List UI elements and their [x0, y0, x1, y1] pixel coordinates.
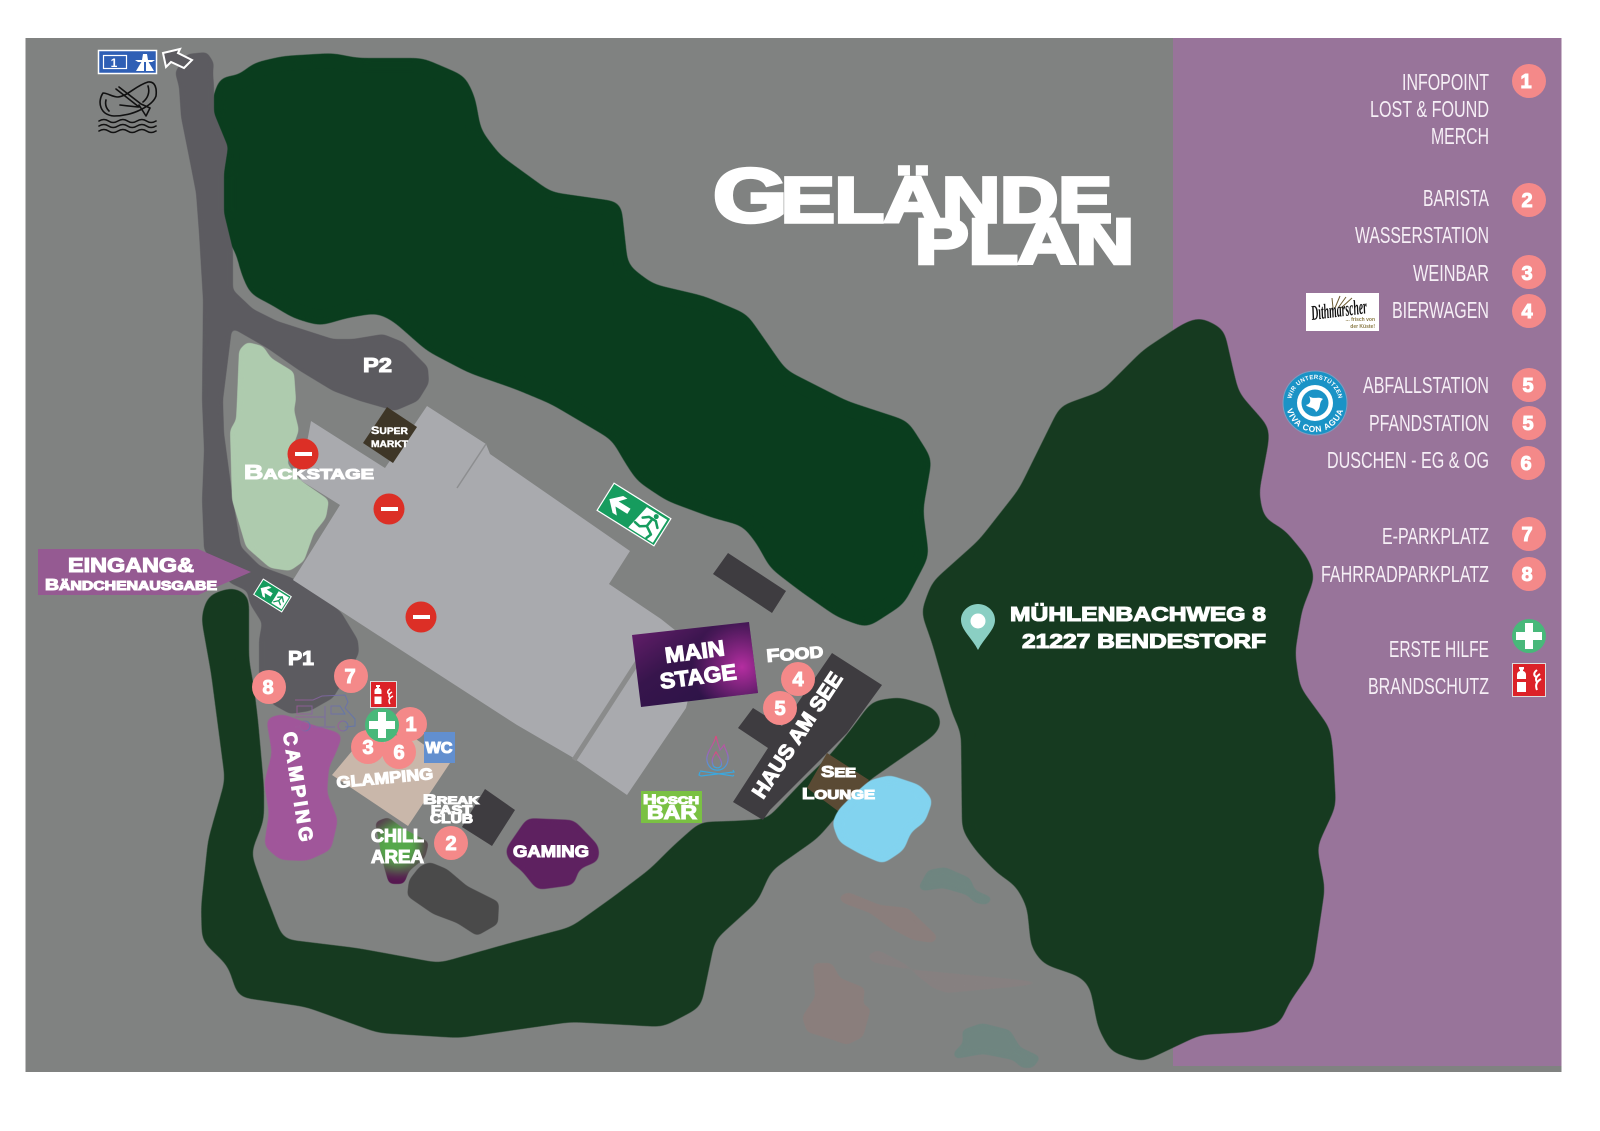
- icon: fire extinguisher sign on map: [370, 682, 396, 708]
- building: east shed: [713, 553, 786, 613]
- address: 21227 BENDESTORF: [1022, 631, 1266, 653]
- legend: weinbar: WEINBAR: [1413, 260, 1489, 286]
- road and parking areas: [175, 52, 429, 714]
- legend: erste hilfe: ERSTE HILFE: [1389, 636, 1489, 662]
- area: chill area: [375, 817, 429, 884]
- legend fire extinguisher icon: [1512, 664, 1546, 696]
- legend marker 5 pfand: 5: [1522, 413, 1534, 435]
- icon: autobahn sign: 1: [111, 56, 118, 70]
- exit sign: small: [254, 579, 291, 612]
- label: breakfast club: CLUB: [430, 811, 473, 826]
- area: glamping: [332, 733, 450, 826]
- marker 8 on map: [252, 670, 286, 704]
- no-entry sign 2: [374, 494, 404, 524]
- legend marker 5 pfand: [1512, 406, 1546, 440]
- title: GELÄNDE: [713, 154, 1112, 239]
- legend marker 8: [1512, 557, 1546, 591]
- legend marker 1: [1512, 64, 1546, 98]
- label: supermarkt: [371, 425, 409, 449]
- forest: north: [211, 53, 932, 628]
- legend: infopoint, lost and found, merch: [1370, 69, 1489, 149]
- icon: campfire: [699, 736, 734, 776]
- panel: legend background: [1173, 38, 1562, 1066]
- label: breakfast club: B REAK: [423, 791, 479, 807]
- faint decorative terrain patches: [802, 867, 1042, 1068]
- label: gaming: GAMING: [513, 842, 589, 861]
- main stage: MAIN: [663, 635, 726, 668]
- marker 3 on map: [351, 730, 385, 764]
- sign: hosch bar: BAR: [647, 803, 697, 824]
- label: p2: P2: [363, 355, 392, 377]
- marker 4 on map: [781, 662, 815, 696]
- icon: autobahn sign: [98, 50, 156, 74]
- label: breakfast club: [423, 791, 479, 826]
- label: chill area: [371, 826, 424, 867]
- area: gaming: [505, 818, 599, 890]
- label: chill area: AREA: [371, 847, 424, 867]
- forest: east: [921, 317, 1336, 1062]
- legend first aid icon: [1512, 619, 1546, 653]
- exit sign: large: [597, 483, 671, 546]
- legend: infopoint, lost and found, merch: MERCH: [1431, 123, 1489, 149]
- lake: [832, 775, 933, 864]
- label: breakfast club: FAST: [431, 803, 473, 817]
- logo: viva con agua: VIVA CON AGUA: [1287, 408, 1344, 432]
- arrow: direction to autobahn: [163, 49, 192, 68]
- building: breakfast club: [462, 789, 515, 846]
- legend marker 3: [1512, 255, 1546, 289]
- legend marker 8: 8: [1521, 564, 1533, 586]
- no-entry sign 3: [406, 602, 436, 632]
- legend marker 6: 6: [1520, 453, 1532, 475]
- legend marker 6: [1511, 446, 1545, 480]
- icon: canoe: [99, 82, 156, 132]
- legend: brandschutz: BRANDSCHUTZ: [1368, 673, 1489, 699]
- label: haus am see: HAUS AM SEE: [748, 668, 848, 803]
- logo: dithmarscher: der Küste!: [1350, 324, 1375, 330]
- entrance arrow: BÄNDCHENAUSGABE: [45, 577, 217, 594]
- logo: dithmarscher: Dithmarscher: [1309, 294, 1369, 325]
- forest: south-west: [201, 587, 943, 1038]
- marker 2 on map: [434, 826, 468, 860]
- title: PLAN: [915, 206, 1134, 278]
- building: haus am see: [733, 653, 882, 820]
- label: see lounge: SEE: [821, 764, 856, 781]
- label: supermarkt: SUPER: [371, 425, 409, 437]
- logo: viva con agua: WIR UNTERSTÜTZEN: [1287, 374, 1342, 398]
- legend marker 3: 3: [1521, 263, 1533, 285]
- marker 1 on map: 1: [405, 714, 417, 736]
- legend: pfandstation: PFANDSTATION: [1369, 410, 1489, 436]
- marker 5 on map: 5: [774, 698, 786, 720]
- marker 6 on map: 6: [393, 742, 405, 764]
- legend marker 2: 2: [1521, 190, 1533, 212]
- marker 7 on map: [334, 659, 368, 693]
- building: supermarkt: [363, 407, 417, 463]
- legend marker 2: [1512, 183, 1546, 217]
- title: [713, 154, 1134, 278]
- marker 1 on map: [393, 707, 427, 741]
- sign: wc: WC: [426, 740, 453, 757]
- logo: dithmarscher: [1306, 293, 1379, 331]
- legend marker 5 abfall: [1512, 368, 1546, 402]
- legend: barista: BARISTA: [1423, 185, 1489, 211]
- entrance arrow: EINGANG&: [68, 555, 194, 577]
- legend marker 4: 4: [1521, 301, 1533, 323]
- marker 3 on map: 3: [362, 737, 374, 759]
- legend: wasserstation: WASSERSTATION: [1355, 222, 1489, 248]
- legend marker 5 abfall: 5: [1522, 375, 1534, 397]
- label: camping: CAMPING: [278, 730, 317, 847]
- marker 4 on map: 4: [792, 669, 804, 691]
- marker 7 on map: 7: [344, 666, 356, 688]
- address: MÜHLENBACHWEG 8: [1010, 603, 1266, 626]
- logo: dithmarscher: ... frisch von: [1346, 317, 1375, 323]
- area: backstage: [230, 342, 329, 571]
- legend marker 7: [1512, 517, 1546, 551]
- sign: hosch bar: [641, 791, 702, 824]
- label: food: FOOD: [766, 641, 824, 666]
- marker 6 on map: [382, 735, 416, 769]
- sign: hosch bar: H OSCH: [643, 791, 699, 807]
- icon: camper van: [295, 695, 355, 731]
- legend: infopoint, lost and found, merch: LOST & FOUND: [1370, 96, 1489, 122]
- label: p1: P1: [288, 648, 314, 670]
- legend: infopoint, lost and found, merch: INFOPOINT: [1402, 69, 1489, 95]
- label: supermarkt: MARKT: [371, 439, 409, 449]
- building: see lounge: [807, 753, 869, 817]
- festival ground: [293, 406, 700, 795]
- legend: bierwagen: BIERWAGEN: [1392, 297, 1489, 323]
- label: see lounge: LOUNGE: [802, 786, 875, 803]
- marker 8 on map: 8: [262, 677, 274, 699]
- legend marker 7: 7: [1521, 524, 1533, 546]
- label: chill area: CHILL: [371, 826, 424, 846]
- legend marker 4: [1512, 294, 1546, 328]
- main stage: [632, 622, 758, 707]
- label: glamping: GLAMPING: [336, 766, 434, 792]
- legend: abfallstation: ABFALLSTATION: [1363, 372, 1489, 398]
- marker 5 on map: [763, 691, 797, 725]
- address: [1010, 603, 1266, 653]
- no-entry sign 1: [288, 438, 318, 470]
- legend marker 1: 1: [1520, 71, 1532, 93]
- legend: e-parkplatz: E-PARKPLATZ: [1382, 523, 1489, 549]
- area: camping: [264, 714, 343, 861]
- main stage: STAGE: [658, 659, 738, 694]
- marker 2 on map: 2: [445, 833, 457, 855]
- legend: fahrradparkplatz: FAHRRADPARKPLATZ: [1321, 561, 1489, 587]
- logo: viva con agua: [1282, 370, 1348, 436]
- rock area: [407, 862, 499, 936]
- legend: duschen: DUSCHEN - EG & OG: [1327, 447, 1489, 473]
- label: see lounge: [802, 764, 875, 803]
- entrance arrow: [38, 549, 251, 595]
- address pin icon: [961, 604, 995, 650]
- first aid marker on map: [365, 708, 399, 742]
- label: backstage: B ACKSTAGE: [244, 462, 374, 484]
- sign: wc: [424, 732, 455, 763]
